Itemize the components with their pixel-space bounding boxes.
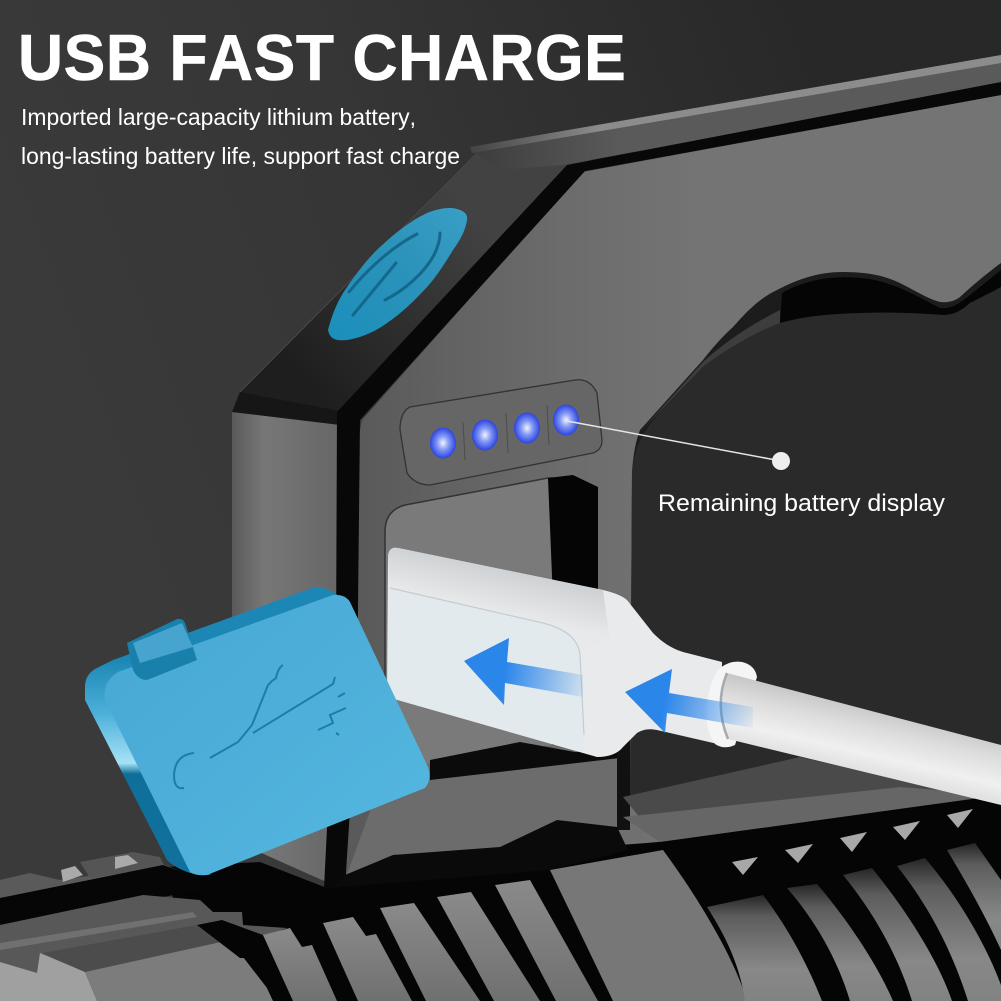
large panel bbox=[550, 850, 747, 1001]
main face bbox=[345, 95, 1001, 880]
stepped wedge under face bbox=[330, 820, 628, 888]
plug body bbox=[387, 548, 722, 757]
arrow: into neck bbox=[625, 669, 753, 733]
chamfered top surface bbox=[232, 150, 600, 425]
right slats bbox=[707, 895, 822, 1001]
callout: remaining battery bbox=[567, 421, 945, 517]
callout: remaining battery: Remaining battery display bbox=[658, 490, 945, 517]
gray step bbox=[0, 895, 287, 975]
title: USB FAST CHARGE bbox=[18, 21, 626, 94]
dark opening bbox=[630, 263, 1001, 800]
cable bbox=[721, 673, 1001, 805]
cable collar bbox=[706, 662, 757, 747]
cover tab bbox=[127, 619, 197, 680]
flashlight bottom fins bbox=[0, 757, 1001, 1001]
usb cable and plug bbox=[387, 548, 1001, 805]
plug upper shine bbox=[388, 548, 610, 650]
shoulder tabs bbox=[61, 866, 83, 882]
side wall bbox=[232, 412, 340, 888]
led 1 bbox=[430, 428, 456, 458]
description: Imported large-capacity lithium battery, bbox=[21, 104, 416, 130]
flashlight body bbox=[232, 55, 1001, 888]
description bbox=[21, 104, 460, 169]
black rail bbox=[0, 865, 203, 925]
triangle highlights bbox=[732, 809, 973, 875]
left shoulder bbox=[0, 865, 195, 900]
description: long-lasting battery life, support fast charge bbox=[21, 143, 460, 169]
port recess bbox=[385, 478, 553, 790]
left slats bbox=[263, 928, 337, 1001]
black base bbox=[165, 795, 1001, 1001]
light corner bbox=[0, 953, 97, 1001]
led 2 bbox=[472, 420, 498, 450]
usb port cover bbox=[85, 587, 429, 875]
cover rim bbox=[85, 587, 345, 875]
led 4 bbox=[553, 404, 579, 436]
black stripe bbox=[197, 920, 293, 1001]
center gray bbox=[85, 940, 277, 1001]
plug front face bbox=[387, 588, 584, 752]
arrow: into plug bbox=[464, 638, 583, 705]
black trim band bbox=[324, 82, 1001, 888]
battery indicator panel bbox=[400, 380, 602, 485]
cover face bbox=[105, 595, 429, 875]
power button bbox=[328, 208, 467, 340]
power symbol grooves bbox=[349, 233, 440, 315]
led 3 bbox=[514, 412, 540, 444]
usb symbol bbox=[174, 665, 346, 788]
rear band bbox=[623, 757, 1001, 842]
inner opening crescent bbox=[703, 270, 1001, 367]
